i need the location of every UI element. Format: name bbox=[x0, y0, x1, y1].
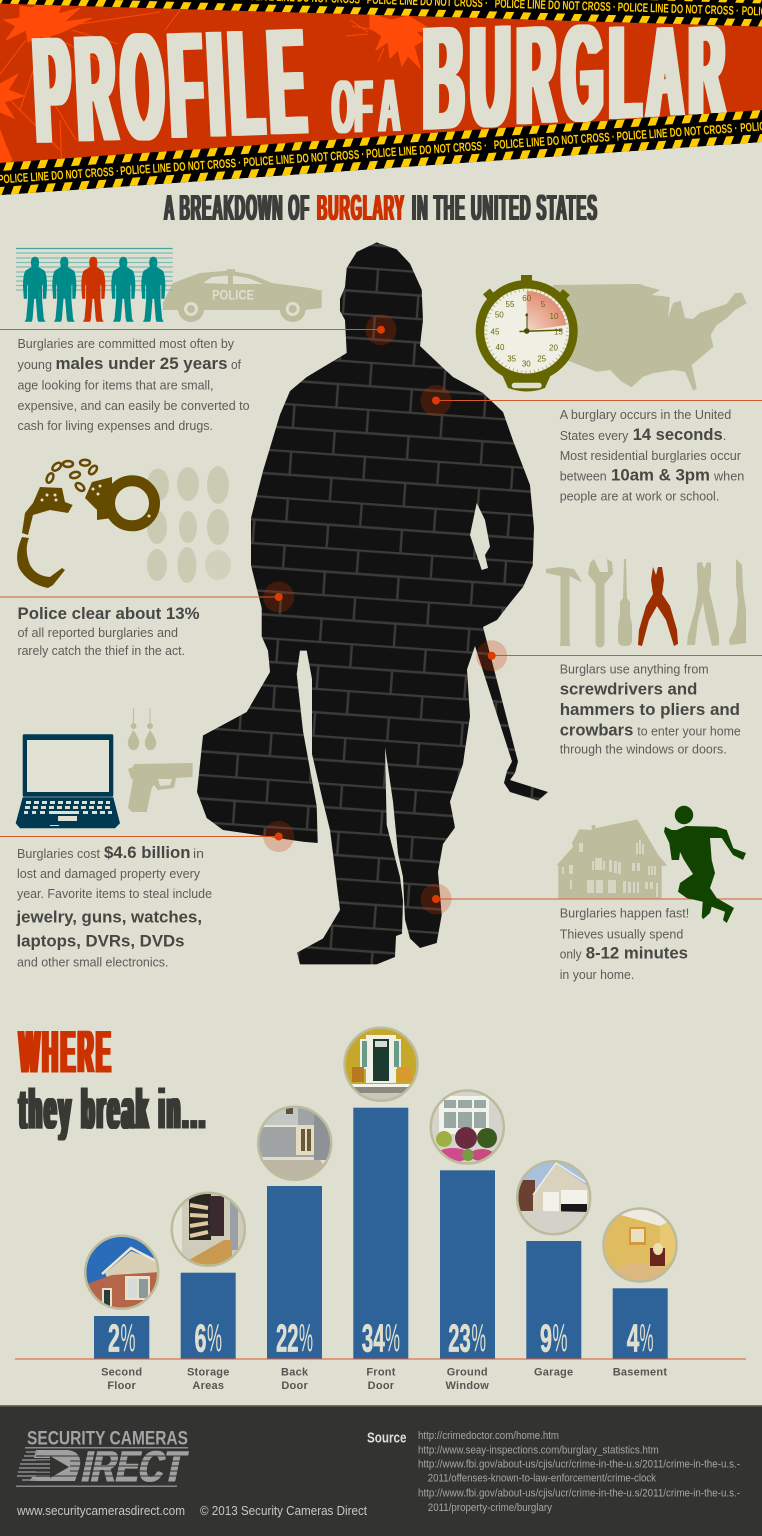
text block: how often: A burglary occurs in the United bbox=[560, 407, 731, 422]
tool: tan pliers bbox=[687, 562, 719, 646]
burglar silhouette with brick texture bbox=[197, 242, 548, 964]
text block: who: males under 25 years bbox=[56, 354, 228, 373]
text block: who: of bbox=[231, 357, 241, 372]
text block: tools: screwdrivers and bbox=[560, 679, 697, 698]
text block: tools: hammers to pliers and bbox=[560, 700, 740, 719]
hot spot: crowbar bbox=[476, 640, 507, 671]
bar: second floor bbox=[94, 1316, 149, 1392]
bar: second floor: % bbox=[120, 1318, 136, 1361]
bar: back door: Back bbox=[281, 1367, 309, 1379]
text block: cost: Burglaries cost bbox=[17, 846, 100, 861]
text block: cost: lost and damaged property every bbox=[17, 866, 200, 881]
source list: http://crimedoctor.com/home.htm bbox=[418, 1430, 559, 1442]
text block: speed: Burglaries happen fast! bbox=[560, 906, 689, 921]
title words: OF A: OF A bbox=[332, 65, 400, 150]
bar: basement: Basement bbox=[613, 1367, 667, 1379]
police tape: bottom: POLICE LINE DO NOT CROSS · bbox=[243, 147, 365, 170]
bar: front door: Front bbox=[366, 1367, 396, 1379]
bar: back door: 22 bbox=[276, 1318, 298, 1361]
text block: speed: only bbox=[560, 946, 582, 961]
bar: back door bbox=[267, 1186, 322, 1392]
text block: how often: . bbox=[723, 428, 726, 443]
text block: cost: in bbox=[193, 846, 204, 861]
text block: tools: to enter your home bbox=[637, 724, 741, 739]
icon: stopwatch: 5 bbox=[541, 300, 546, 309]
website: www.securitycamerasdirect.com bbox=[16, 1504, 185, 1518]
bar: back door: % bbox=[299, 1318, 313, 1361]
icon: fingerprints bbox=[147, 466, 231, 583]
icon: stopwatch: 50 bbox=[495, 310, 504, 320]
text block: how often bbox=[560, 407, 744, 504]
icon: stopwatch: 15 bbox=[554, 328, 563, 336]
text block: speed: 8-12 minutes bbox=[586, 943, 688, 962]
photo: front door bbox=[344, 1028, 418, 1103]
logo: security cameras direct: SECURITY CAMERAS bbox=[27, 1428, 188, 1450]
text block: who: expensive, and can easily be converted to bbox=[18, 398, 250, 413]
text block: police clear: rarely catch the thief in the act. bbox=[18, 643, 185, 658]
bar: second floor: Second bbox=[101, 1367, 142, 1379]
bar: garage: 9 bbox=[540, 1318, 552, 1361]
bar: front door: Door bbox=[368, 1380, 395, 1392]
source list: 2011/property-crime/burglary bbox=[428, 1502, 552, 1514]
icon: handgun bbox=[128, 763, 193, 812]
icon: US map bbox=[540, 284, 747, 391]
source label: Source bbox=[367, 1430, 406, 1446]
copyright: © 2013 Security Cameras Direct bbox=[200, 1504, 367, 1518]
bar: second floor: Floor bbox=[107, 1380, 137, 1392]
icon: laptop bbox=[16, 734, 120, 828]
police tape: top bbox=[0, 0, 762, 30]
bar: basement: 4 bbox=[627, 1318, 639, 1361]
text block: how often: States every bbox=[560, 428, 629, 443]
icon: stopwatch: 25 bbox=[537, 354, 547, 364]
hot spot: chest bbox=[420, 385, 452, 416]
bar: garage: Garage bbox=[534, 1367, 573, 1379]
text block: tools: crowbars bbox=[560, 721, 633, 740]
text block: cost: $4.6 billion bbox=[104, 843, 190, 862]
source list: 2011/offenses-known-to-law-enforcement/crime-clock bbox=[428, 1473, 656, 1485]
footer bbox=[0, 1405, 762, 1536]
hot spot: hip bbox=[263, 582, 294, 612]
bar: storage areas: Storage bbox=[187, 1367, 230, 1379]
text block: how often: between bbox=[560, 469, 607, 484]
source list: http://www.seay-inspections.com/burglary_statistics.htm bbox=[418, 1444, 659, 1456]
bar: front door: % bbox=[385, 1318, 400, 1361]
bar: ground window: Ground bbox=[447, 1367, 488, 1379]
icon: stopwatch: 35 bbox=[507, 354, 517, 364]
photo: second floor bbox=[84, 1235, 160, 1312]
text block: cost: year. Favorite items to steal include bbox=[17, 886, 212, 901]
logo: security cameras direct: IRECT bbox=[78, 1443, 190, 1491]
icon: stopwatch bbox=[476, 275, 578, 392]
text block: speed: in your home. bbox=[560, 967, 634, 982]
tool: screwdriver bbox=[618, 559, 632, 646]
title word: PROFILE: PROFILE bbox=[30, 0, 315, 176]
police tape: bottom: POLICE LINE DO NOT CROSS · bbox=[0, 164, 119, 187]
logo: security cameras direct bbox=[16, 1428, 190, 1491]
icon: police lineup bbox=[16, 248, 173, 322]
icon: running burglar bbox=[664, 806, 746, 923]
subtitle: A BREAKDOWN OF bbox=[164, 187, 310, 228]
bar: garage bbox=[526, 1241, 581, 1379]
text block: cost: and other small electronics. bbox=[17, 955, 168, 970]
bar: storage areas: % bbox=[207, 1318, 222, 1361]
photo: storage areas bbox=[171, 1192, 247, 1268]
text block: how often: people are at work or school. bbox=[560, 489, 719, 504]
text block: how often: 14 seconds bbox=[633, 425, 723, 444]
text block: cost: jewelry, guns, watches, bbox=[16, 908, 202, 927]
bar: storage areas: Areas bbox=[192, 1380, 224, 1392]
text block: tools bbox=[560, 661, 741, 756]
icon: house bbox=[557, 819, 667, 898]
source list bbox=[418, 1430, 740, 1514]
hot spot: head bbox=[366, 314, 396, 345]
text block: police clear bbox=[18, 604, 200, 658]
bar: storage areas bbox=[181, 1273, 236, 1392]
police tape: bottom: POLICE LINE DO NOT CROSS · bbox=[120, 156, 241, 178]
icon: stopwatch: 60 bbox=[522, 294, 532, 303]
photo: ground window bbox=[431, 1090, 504, 1164]
bar: ground window: Window bbox=[446, 1380, 489, 1392]
tool: wrench bbox=[588, 559, 613, 648]
text block: police clear: Police clear about 13% bbox=[18, 604, 200, 623]
bar: back door: Door bbox=[281, 1380, 308, 1392]
bar: front door bbox=[353, 1108, 408, 1392]
bar: ground window: 23 bbox=[448, 1318, 471, 1361]
icon: handcuffs bbox=[17, 460, 155, 588]
text block: speed: Thieves usually spend bbox=[560, 926, 683, 941]
connector lines bbox=[0, 330, 762, 899]
bar: ground window bbox=[440, 1170, 495, 1392]
icon: stopwatch: 45 bbox=[491, 328, 500, 336]
icon: earrings bbox=[128, 708, 156, 750]
text block: cost: laptops, DVRs, DVDs bbox=[16, 932, 184, 951]
tool: red pliers bbox=[638, 567, 678, 646]
icon: stopwatch: 30 bbox=[522, 360, 531, 369]
icon: stopwatch: 20 bbox=[549, 344, 558, 352]
bar: storage areas: 6 bbox=[194, 1318, 206, 1361]
text block: who: Burglaries are committed most often by bbox=[18, 336, 234, 351]
police tape: bottom: POLICE LINE DO NOT CROSS · bbox=[366, 139, 487, 161]
icon: stopwatch: 55 bbox=[506, 300, 515, 309]
infographic canvas: WHERE bbox=[19, 1018, 113, 1085]
bar: basement: % bbox=[640, 1318, 654, 1361]
text block: who: cash for living expenses and drugs. bbox=[18, 418, 213, 433]
infographic canvas: they break in... bbox=[19, 1077, 207, 1141]
text block: tools: Burglars use anything from bbox=[560, 661, 709, 676]
photo: garage bbox=[517, 1161, 593, 1236]
icon: burglar tools bbox=[546, 559, 746, 648]
text block: how often: Most residential burglaries occur bbox=[560, 448, 742, 463]
text block: who: age looking for items that are small, bbox=[18, 378, 214, 392]
icon: stopwatch: 10 bbox=[550, 312, 559, 321]
icon: police car bbox=[163, 269, 322, 322]
text block: how often: 10am & 3pm bbox=[611, 466, 710, 485]
police tape: bottom bbox=[0, 103, 762, 196]
bar: garage: % bbox=[552, 1318, 568, 1361]
text block: who bbox=[18, 336, 250, 433]
bar: second floor: 2 bbox=[108, 1318, 120, 1361]
hot spot: bag bbox=[263, 821, 294, 852]
subtitle: BURGLARY bbox=[317, 187, 405, 228]
bar: front door: 34 bbox=[362, 1318, 385, 1361]
text block: how often: when bbox=[713, 469, 744, 484]
hot spot: leg bbox=[420, 884, 452, 914]
bar: basement bbox=[613, 1288, 668, 1379]
text block: speed bbox=[560, 906, 689, 982]
header banner bbox=[0, 0, 762, 176]
bar: ground window: % bbox=[472, 1318, 486, 1361]
tool: utility knife bbox=[729, 559, 746, 645]
police tape: bottom: POLICE LINE DO NOT CROSS · bbox=[493, 130, 615, 152]
title: PROFILE OF A BURGLAR bbox=[30, 0, 731, 176]
tool: hammer bbox=[546, 567, 582, 646]
paint splat: centre bbox=[346, 14, 440, 68]
text block: cost bbox=[16, 843, 212, 970]
text block: police clear: of all reported burglaries and bbox=[18, 625, 178, 640]
photo: back door bbox=[258, 1107, 334, 1180]
icon: stopwatch: 40 bbox=[496, 343, 505, 352]
icon: police car: POLICE bbox=[212, 287, 254, 302]
photo: basement bbox=[604, 1208, 676, 1282]
bar chart: where they break in bbox=[94, 1108, 668, 1392]
paint splat: left bbox=[0, 2, 180, 176]
text block: who: young bbox=[18, 357, 52, 372]
text block: tools: through the windows or doors. bbox=[560, 741, 727, 756]
